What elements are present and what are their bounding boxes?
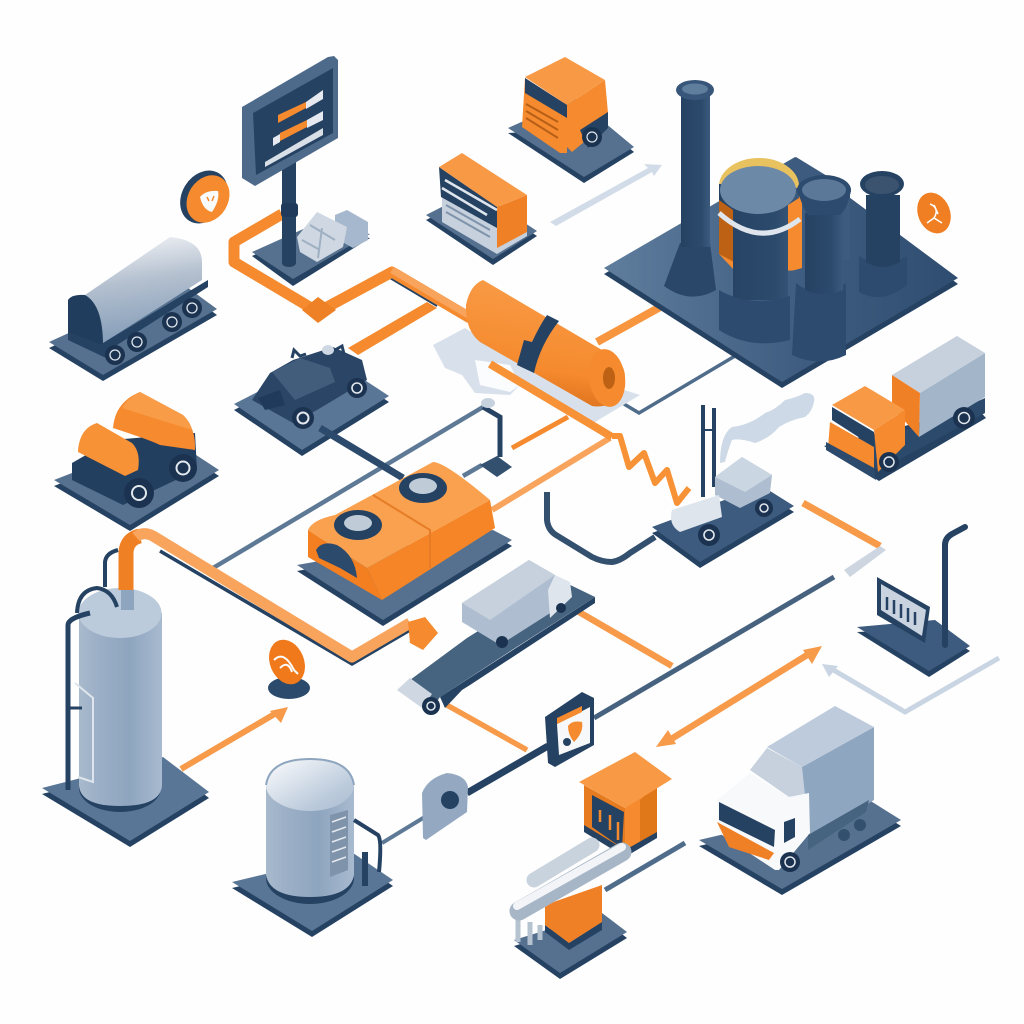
panel: orange kiosk: [579, 752, 672, 857]
steam sheet behind roll: [433, 328, 640, 425]
steam plume: [720, 393, 814, 463]
panel: stacked box machine: [426, 153, 537, 265]
connector lines layer: [181, 306, 880, 890]
icon: orange badge right: [911, 188, 957, 238]
panel: truck right: [824, 336, 986, 481]
panel: tall cylinder tank: [42, 550, 209, 847]
small conveyor nozzle: [844, 546, 886, 577]
panel: orange truck top: [508, 57, 634, 183]
medium chimney: [792, 175, 851, 362]
large tank: [719, 158, 802, 343]
icon: orange pin marker: [263, 634, 311, 699]
pipe junction: [302, 297, 336, 323]
panel: factory tanks and chimneys: [604, 80, 958, 388]
arrow: pale grey up-right: [550, 164, 662, 226]
panel: large white truck: [699, 706, 901, 895]
icon: control box on line: [545, 692, 594, 767]
panel: conveyor with truck: [397, 560, 595, 715]
pipe branch: [348, 302, 437, 355]
panel: billboard with crate stack: [242, 56, 370, 286]
small chimney: [859, 171, 907, 297]
panel: terminal with pipe: [857, 527, 970, 677]
arrowheads: orange: [270, 646, 822, 747]
pipe: orange network upper: [234, 214, 470, 318]
sheet clearing: [475, 360, 520, 392]
valve: [320, 398, 512, 478]
icon: pulley wheel: [422, 773, 468, 840]
panel: drilling rig: [547, 405, 794, 568]
panel: short cylinder tank: [232, 759, 393, 937]
panel: orange domed machine: [297, 462, 512, 626]
panel: pipe press machine: [514, 845, 627, 979]
orange diagonal band: [490, 364, 689, 503]
pipe: orange long pipe with elbow: [126, 534, 438, 664]
icon: orange badge left: [171, 162, 238, 232]
tall chimney: [664, 80, 716, 297]
panel: large orange roll: [466, 280, 629, 409]
panel: tanker trailer left: [49, 237, 217, 381]
panel: orange roller vehicle: [54, 392, 219, 531]
panel: dark vehicle: [234, 345, 389, 456]
arrow: pale grey elbow: [822, 658, 999, 712]
